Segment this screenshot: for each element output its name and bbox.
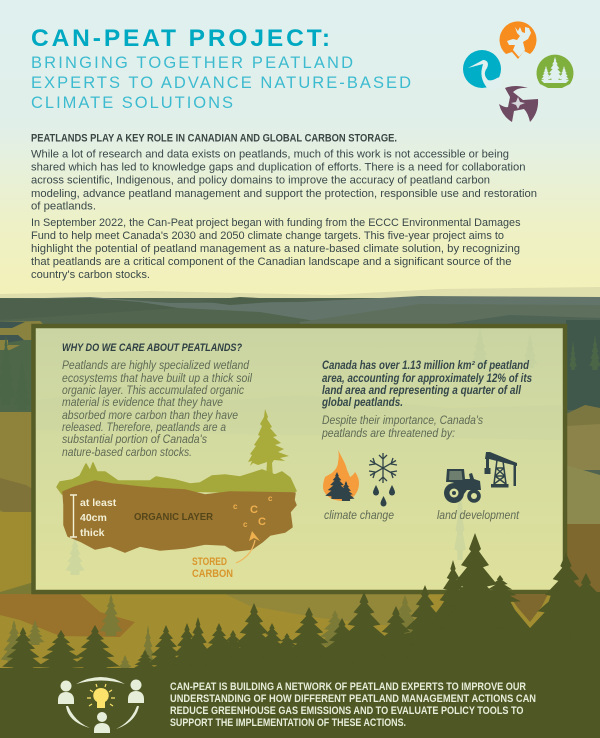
icon: caribou in orange circle [500, 21, 536, 59]
subtitle: BRINGING TOGETHER PEATLAND [31, 54, 353, 72]
foreground forest silhouette [0, 533, 600, 738]
label: stored carbon: CARBON [192, 568, 233, 580]
carbon symbols: c [233, 502, 238, 511]
panel: why do we care about peatlands [34, 326, 565, 592]
label: at least 40cm thick: at least [80, 497, 117, 509]
icon: heron in teal circle [463, 50, 503, 90]
label: stored carbon [192, 556, 233, 580]
label: at least 40cm thick: 40cm [80, 512, 107, 524]
intro paragraph 2 [31, 217, 521, 281]
text: peatland definition: nature-based carbon stocks. [62, 446, 192, 459]
text: threats intro: Despite their importance, Canada's [322, 414, 483, 427]
text: canada statistics: area, accounting for approximately 12% of its [322, 372, 532, 385]
carbon symbols: c [243, 520, 248, 529]
intro paragraph 1: shared which has led to knowledge gaps and duplication of efforts. There is a need for collaboration [31, 162, 526, 174]
background landscape [0, 287, 600, 674]
footer text: REDUCE GREENHOUSE GAS EMISSIONS AND TO EVALUATE POLICY TOOLS TO [170, 705, 524, 717]
intro paragraph 1: modeling, advance peatland management and support the protection, responsible use and restoration [31, 188, 537, 200]
intro paragraph 2: that peatlands are a critical component of the Canadian landscape and a significant source of the [31, 256, 512, 268]
intro paragraph 2: country's carbon stocks. [31, 269, 150, 281]
text: canada statistics [321, 359, 532, 409]
title: CAN-PEAT PROJECT: [31, 25, 330, 52]
label: land development: land development [437, 509, 520, 522]
moss layer [57, 463, 296, 494]
icon: oil pump jack [484, 452, 517, 488]
back trees [0, 335, 600, 410]
logo group [463, 21, 574, 122]
label: stored carbon: STORED [192, 556, 227, 568]
text: peatland definition: absorbed more carbon than they have [62, 409, 238, 422]
subtitle: EXPERTS TO ADVANCE NATURE-BASED [31, 74, 411, 92]
subtitle [31, 54, 411, 112]
icon: trees in green circle [536, 55, 574, 88]
intro paragraph 2: In September 2022, the Can-Peat project began with funding from the ECCC Environmental Damages [31, 217, 521, 229]
carbon symbols: C [258, 516, 266, 528]
icon: tractor [444, 469, 481, 503]
soil layer [63, 481, 296, 552]
arcs [66, 677, 139, 729]
arrow: to stored carbon [236, 531, 260, 563]
icon: tree on peat [248, 409, 289, 478]
intro paragraph 1: of peatlands. [31, 201, 96, 213]
icon: fire with trees [323, 450, 359, 501]
text: canada statistics: Canada has over 1.13 million km² of peatland [322, 359, 530, 372]
icon: snowflake and drops [369, 453, 397, 507]
diagram: organic soil layer [57, 463, 296, 580]
text: peatland definition: material is evidence that they have [62, 396, 223, 409]
intro paragraph 1: across scientific, Indigenous, and policy domains to improve the accuracy of peatland carbon [31, 175, 490, 187]
text: canada statistics: land area and representing a quarter of all [322, 384, 522, 397]
text: canada statistics: global peatlands. [321, 396, 403, 409]
intro paragraph 1: While a lot of research and data exists on peatlands, much of this work is not accessible or being [31, 149, 509, 161]
ruler: 40cm [70, 495, 77, 537]
intro paragraph 2: highlight the potential of peatland management as a nature-based climate solution, by recognizing [31, 243, 520, 255]
intro heading: PEATLANDS PLAY A KEY ROLE IN CANADIAN AND GLOBAL CARBON STORAGE. [31, 133, 397, 145]
label: at least 40cm thick: thick [80, 527, 105, 539]
heading: why do we care: WHY DO WE CARE ABOUT PEATLANDS? [62, 342, 242, 354]
carbon symbols: c [268, 494, 273, 503]
label: organic layer: ORGANIC LAYER [134, 511, 213, 523]
intro paragraph 2: Fund to help meet Canada's 2030 and 2050 climate change targets. This five-year project aims to [31, 230, 504, 242]
text: threats intro [321, 414, 483, 440]
label: at least 40cm thick [80, 497, 117, 539]
text: peatland definition [62, 359, 252, 459]
footer text: SUPPORT THE IMPLEMENTATION OF THESE ACTIONS. [170, 717, 406, 729]
text: peatland definition: released. Therefore, peatlands are a [62, 421, 226, 434]
text: peatland definition: Peatlands are highly specialized wetland [62, 359, 249, 372]
foreground trees back layer [1, 594, 424, 680]
intro paragraph 1 [31, 149, 537, 213]
carbon symbols: C [250, 504, 258, 516]
people [58, 680, 144, 733]
subtitle: CLIMATE SOLUTIONS [31, 94, 233, 112]
text: peatland definition: organic layer. This accumulated organic [62, 384, 244, 397]
text: peatland definition: substantial portion of Canada's [62, 433, 207, 446]
background sky [0, 0, 600, 300]
footer text [170, 681, 536, 729]
footer text: UNDERSTANDING OF HOW DIFFERENT PEATLAND MANAGEMENT ACTIONS CAN [170, 693, 536, 705]
label: climate change: climate change [324, 509, 394, 522]
text: peatland definition: ecosystems that have built up a thick soil [62, 372, 252, 385]
footer text: CAN-PEAT IS BUILDING A NETWORK OF PEATLAND EXPERTS TO IMPROVE OUR [170, 681, 526, 693]
lightbulb [87, 684, 115, 708]
icon: purple triskele [499, 86, 538, 122]
carbon symbols [233, 494, 273, 529]
title block [31, 25, 411, 112]
text: threats intro: peatlands are threatened by: [321, 427, 455, 440]
icon: network of experts [58, 677, 144, 733]
